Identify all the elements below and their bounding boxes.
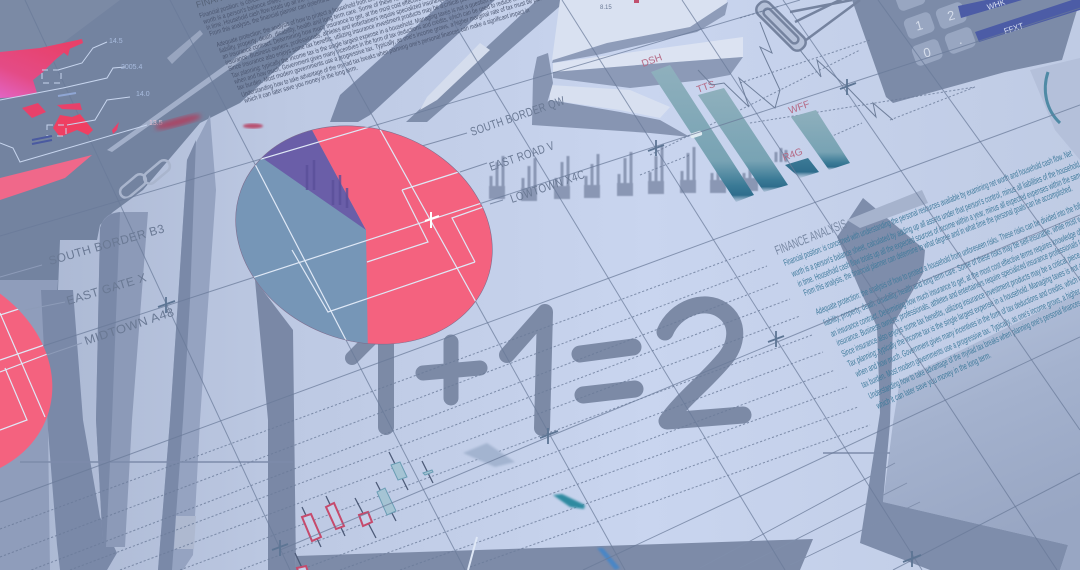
paper clips bbox=[753, 0, 860, 54]
teal arc gauge bbox=[1045, 72, 1060, 123]
pie chart, left partial bbox=[0, 294, 52, 468]
paper chain links on desk bbox=[118, 158, 172, 200]
axis labels, left: SOUTH BORDER B3 bbox=[47, 221, 166, 268]
axis labels, right bbox=[415, 93, 587, 206]
map: Australia bbox=[53, 114, 93, 137]
faint table edge lines bbox=[20, 453, 890, 462]
map: lower continent bbox=[0, 155, 92, 200]
map value labels: 14.0 bbox=[136, 91, 150, 98]
bar chart: R4G bbox=[781, 146, 805, 164]
map value labels: 2005.4 bbox=[121, 64, 143, 71]
bar chart: TTS bbox=[695, 79, 717, 96]
bar chart bbox=[640, 52, 850, 202]
blurred red smudges bbox=[154, 112, 263, 132]
axis labels, left: MIDTOWN A48 bbox=[83, 305, 176, 348]
bar chart: WFF bbox=[787, 99, 811, 117]
map value labels: 14.5 bbox=[109, 38, 123, 45]
white overlay lines on pie bbox=[254, 128, 482, 340]
equation: 1+1=2 bbox=[352, 305, 743, 428]
right document text: finance analysis bbox=[773, 148, 1080, 411]
calculator label bars: FFXT bbox=[1003, 21, 1025, 36]
map: islands bbox=[22, 48, 119, 134]
wedge: blue bbox=[236, 131, 368, 343]
photo shadows: dark desk, pens and paper bbox=[0, 0, 813, 570]
bar chart: DSH bbox=[640, 52, 664, 70]
wedge: purple bbox=[262, 130, 366, 230]
axis labels, right: LOWTOWN X4C bbox=[508, 167, 587, 206]
bar: DSH bbox=[651, 65, 754, 202]
map: Asia bbox=[0, 39, 83, 98]
thin ruled lines, lower right bbox=[700, 463, 920, 568]
stock zigzag line bbox=[698, 22, 893, 120]
wedge: red bbox=[312, 126, 492, 344]
map target brackets bbox=[42, 70, 66, 136]
spiral ghost on purple bbox=[307, 160, 347, 208]
map small bars bbox=[32, 93, 76, 144]
calculator label bars bbox=[958, 0, 1080, 42]
blurred markers on notebook bbox=[463, 443, 620, 570]
bar: WFF bbox=[791, 110, 850, 170]
notebook spiral binding bbox=[489, 146, 786, 201]
calculator keys bbox=[893, 0, 977, 67]
bar: R4G bbox=[785, 158, 819, 178]
map leader lines bbox=[0, 42, 147, 162]
pie chart bbox=[235, 126, 493, 344]
calculator keys: 2 bbox=[946, 7, 957, 24]
world map bbox=[0, 38, 163, 200]
candlestick chart bbox=[295, 452, 433, 570]
map value labels bbox=[109, 38, 163, 127]
calculator keys: . bbox=[956, 32, 964, 47]
bar: TTS bbox=[698, 88, 788, 192]
axis labels, left bbox=[0, 221, 176, 355]
calculator keys: 1 bbox=[914, 17, 925, 34]
pens, top centre bbox=[532, 0, 743, 137]
top-left document text bbox=[195, 0, 553, 105]
axis labels, right: SOUTH BORDER QW bbox=[468, 93, 567, 139]
map value labels: 13.5 bbox=[149, 120, 163, 127]
calculator bbox=[852, 0, 1080, 103]
crosshair markers bbox=[158, 79, 921, 567]
paper sheet shadow, right bbox=[837, 58, 1080, 570]
axis labels, left: EAST GATE X bbox=[65, 270, 148, 308]
right document text: finance analysis: which it can later save you money in the long term. bbox=[874, 350, 993, 411]
calculator keys: 0 bbox=[922, 44, 933, 61]
heading: finance analysis: FINANCE ANALYSIS bbox=[773, 216, 849, 258]
top-left document text: which it can later save you money in the long term. bbox=[243, 65, 359, 105]
pens, top centre: 8.15 bbox=[600, 5, 612, 11]
axis labels, right: EAST ROAD V bbox=[487, 138, 556, 174]
